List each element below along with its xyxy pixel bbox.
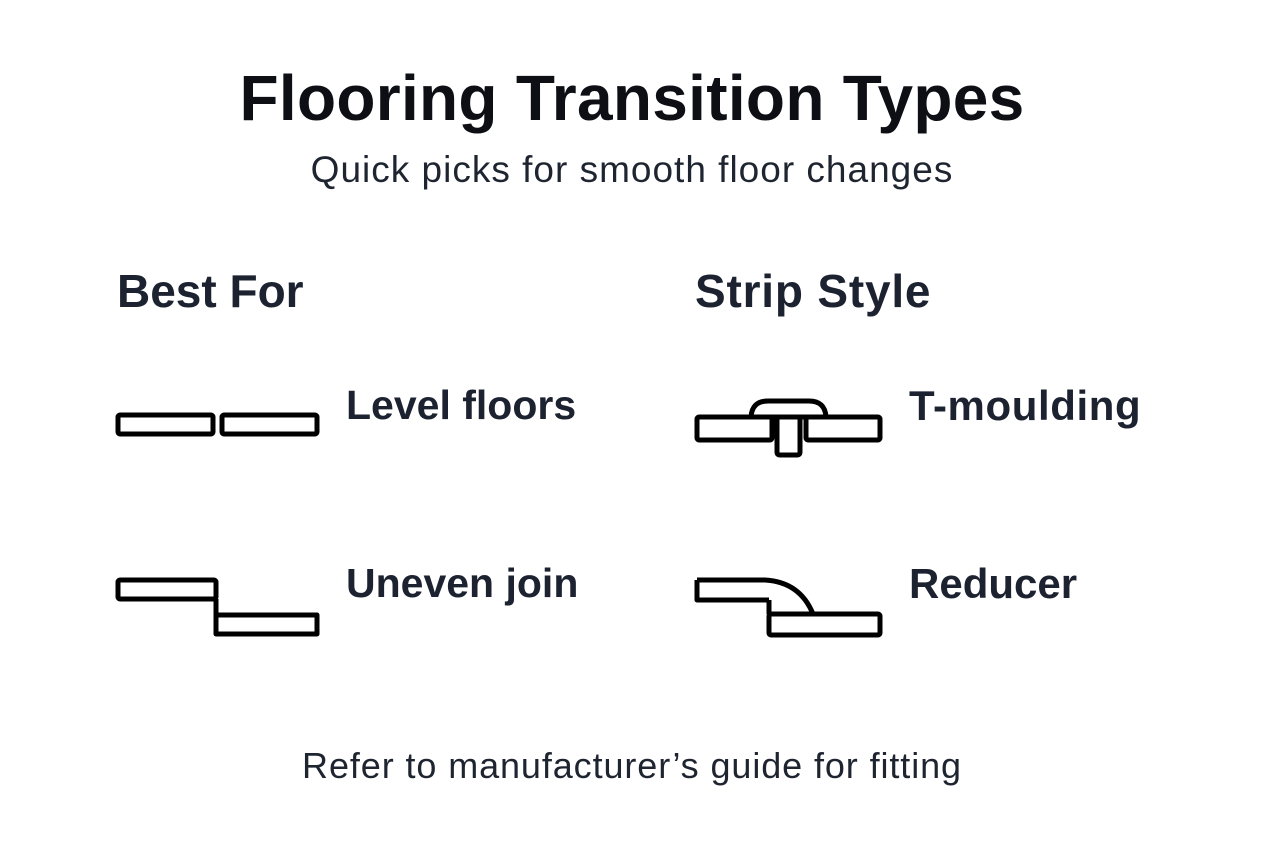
label: uneven join: Uneven join: [346, 560, 578, 606]
heading: Strip Style: Strip Style: [695, 265, 931, 317]
label: reducer: Reducer: [909, 560, 1077, 607]
subtitle: Quick picks for smooth floor changes: [311, 149, 953, 190]
label: T-moulding: T-moulding: [909, 382, 1141, 429]
footer note: Refer to manufacturer’s guide for fitting: [302, 745, 962, 786]
heading: Best For: Best For: [117, 265, 304, 317]
label: level floors: Level floors: [346, 382, 576, 428]
title: Flooring Transition Types: [239, 62, 1025, 134]
